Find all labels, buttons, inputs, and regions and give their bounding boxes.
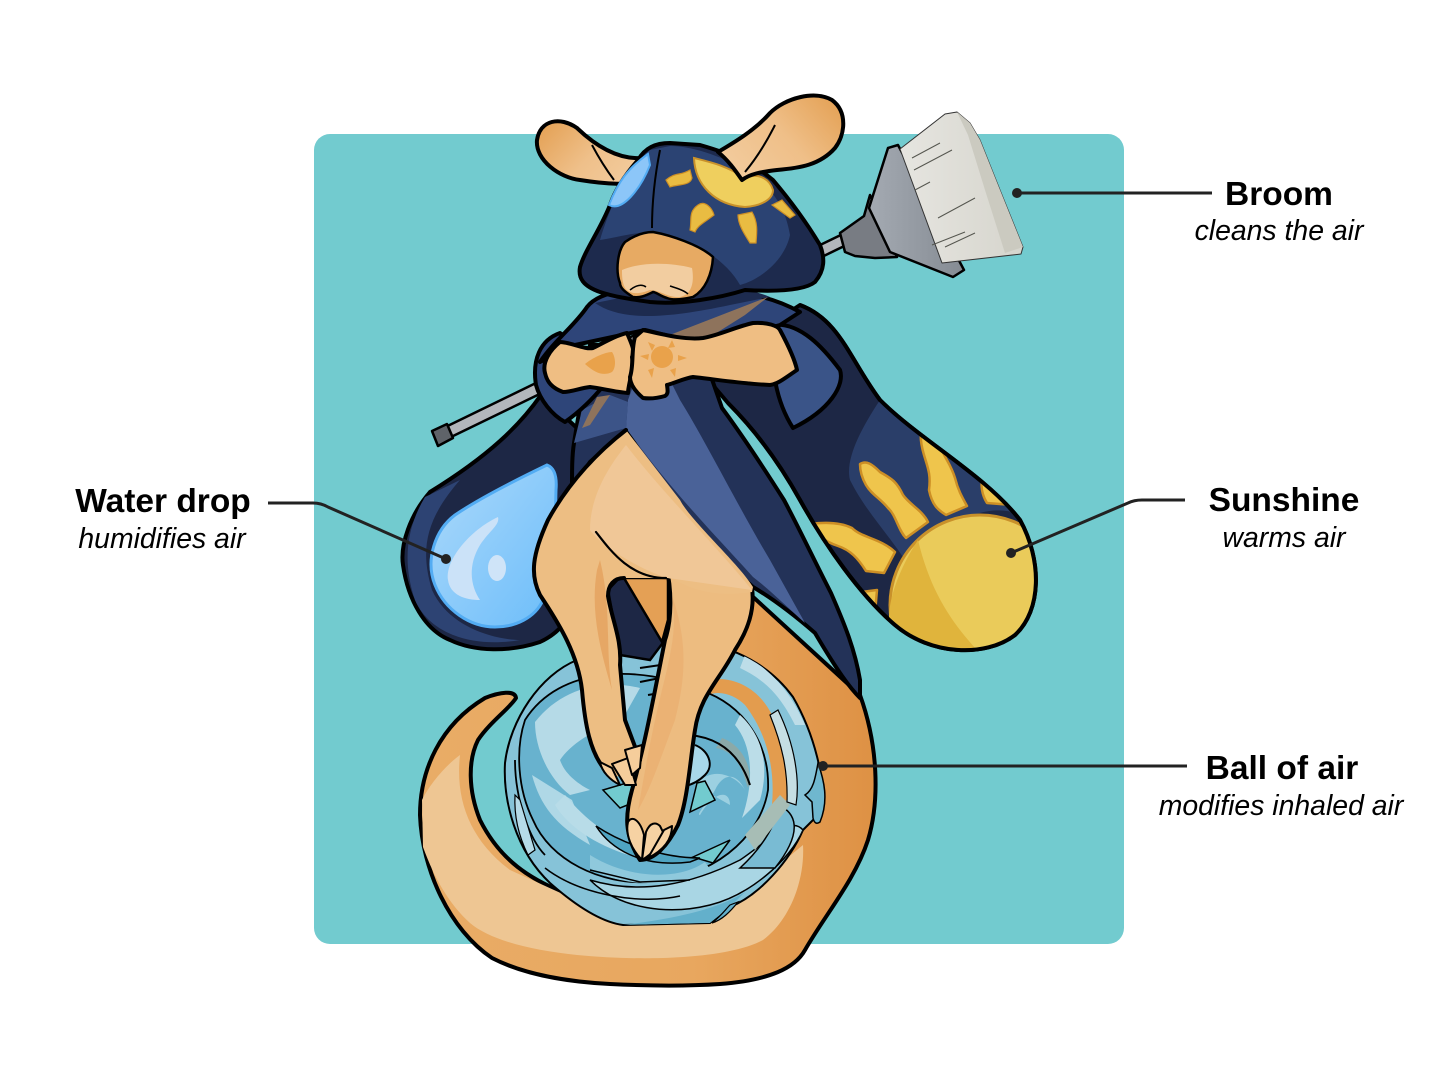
broom collar [840,195,897,258]
label: ball of air: modifies inhaled air [1159,790,1405,822]
muzzle [618,232,713,299]
right ear [718,96,843,180]
left sleeve with water drop [402,395,590,649]
hood water drop [609,154,650,206]
cape shoulders [540,285,800,428]
cuff right [770,324,841,428]
sun rays [815,436,1005,605]
tail base [420,585,876,986]
label: ball of air [1159,750,1405,822]
right fist and arm [630,323,797,398]
sun mark [640,340,687,378]
broom [432,112,1023,446]
label: sunshine: Sunshine [1209,482,1359,519]
teal background panel [314,134,1124,944]
illustration: cloaked air creature [402,96,1070,986]
leader: water drop [268,503,451,564]
tail and body [420,585,876,986]
ball spray tips [805,763,825,823]
tail highlight [422,755,803,958]
label: water drop: Water drop [75,483,251,520]
broom handle [432,232,860,446]
left foot claws [600,745,642,785]
orange gap in ring [708,679,788,805]
robe front [572,340,860,698]
ball lower tip [712,902,738,923]
leader: broom [1012,188,1212,198]
right sleeve with sun [714,303,1038,652]
broom bristles [900,112,1023,263]
label: broom: cleans the air [1195,215,1365,247]
body and left leg [534,430,753,785]
label: sunshine: warms air [1222,522,1347,554]
label: sunshine [1209,482,1359,554]
navy area between legs [608,575,665,660]
label: water drop [75,483,251,555]
label: broom [1195,176,1365,247]
hood sun [666,158,795,243]
label: broom: Broom [1225,176,1333,213]
left fist [544,333,633,393]
label: ball of air: Ball of air [1206,750,1358,787]
orange wedge between legs [624,578,668,642]
label: water drop: humidifies air [78,523,247,555]
cuff left [535,333,604,422]
hood [580,143,823,303]
water drop on left sleeve [431,465,556,627]
sleeve lighter panel [849,402,1010,556]
right leg [627,530,753,860]
hood seam [652,150,660,228]
right foot claws [627,819,672,860]
ball interior [515,655,805,925]
broom cone [869,145,964,277]
strap [662,297,768,345]
ball of air [505,640,825,925]
left ear [537,121,650,184]
water drop mark [585,352,615,374]
leader: sunshine [1006,500,1185,558]
leader: ball of air [818,761,1187,771]
ball outer ring [505,640,823,925]
sun disk [888,514,1034,648]
